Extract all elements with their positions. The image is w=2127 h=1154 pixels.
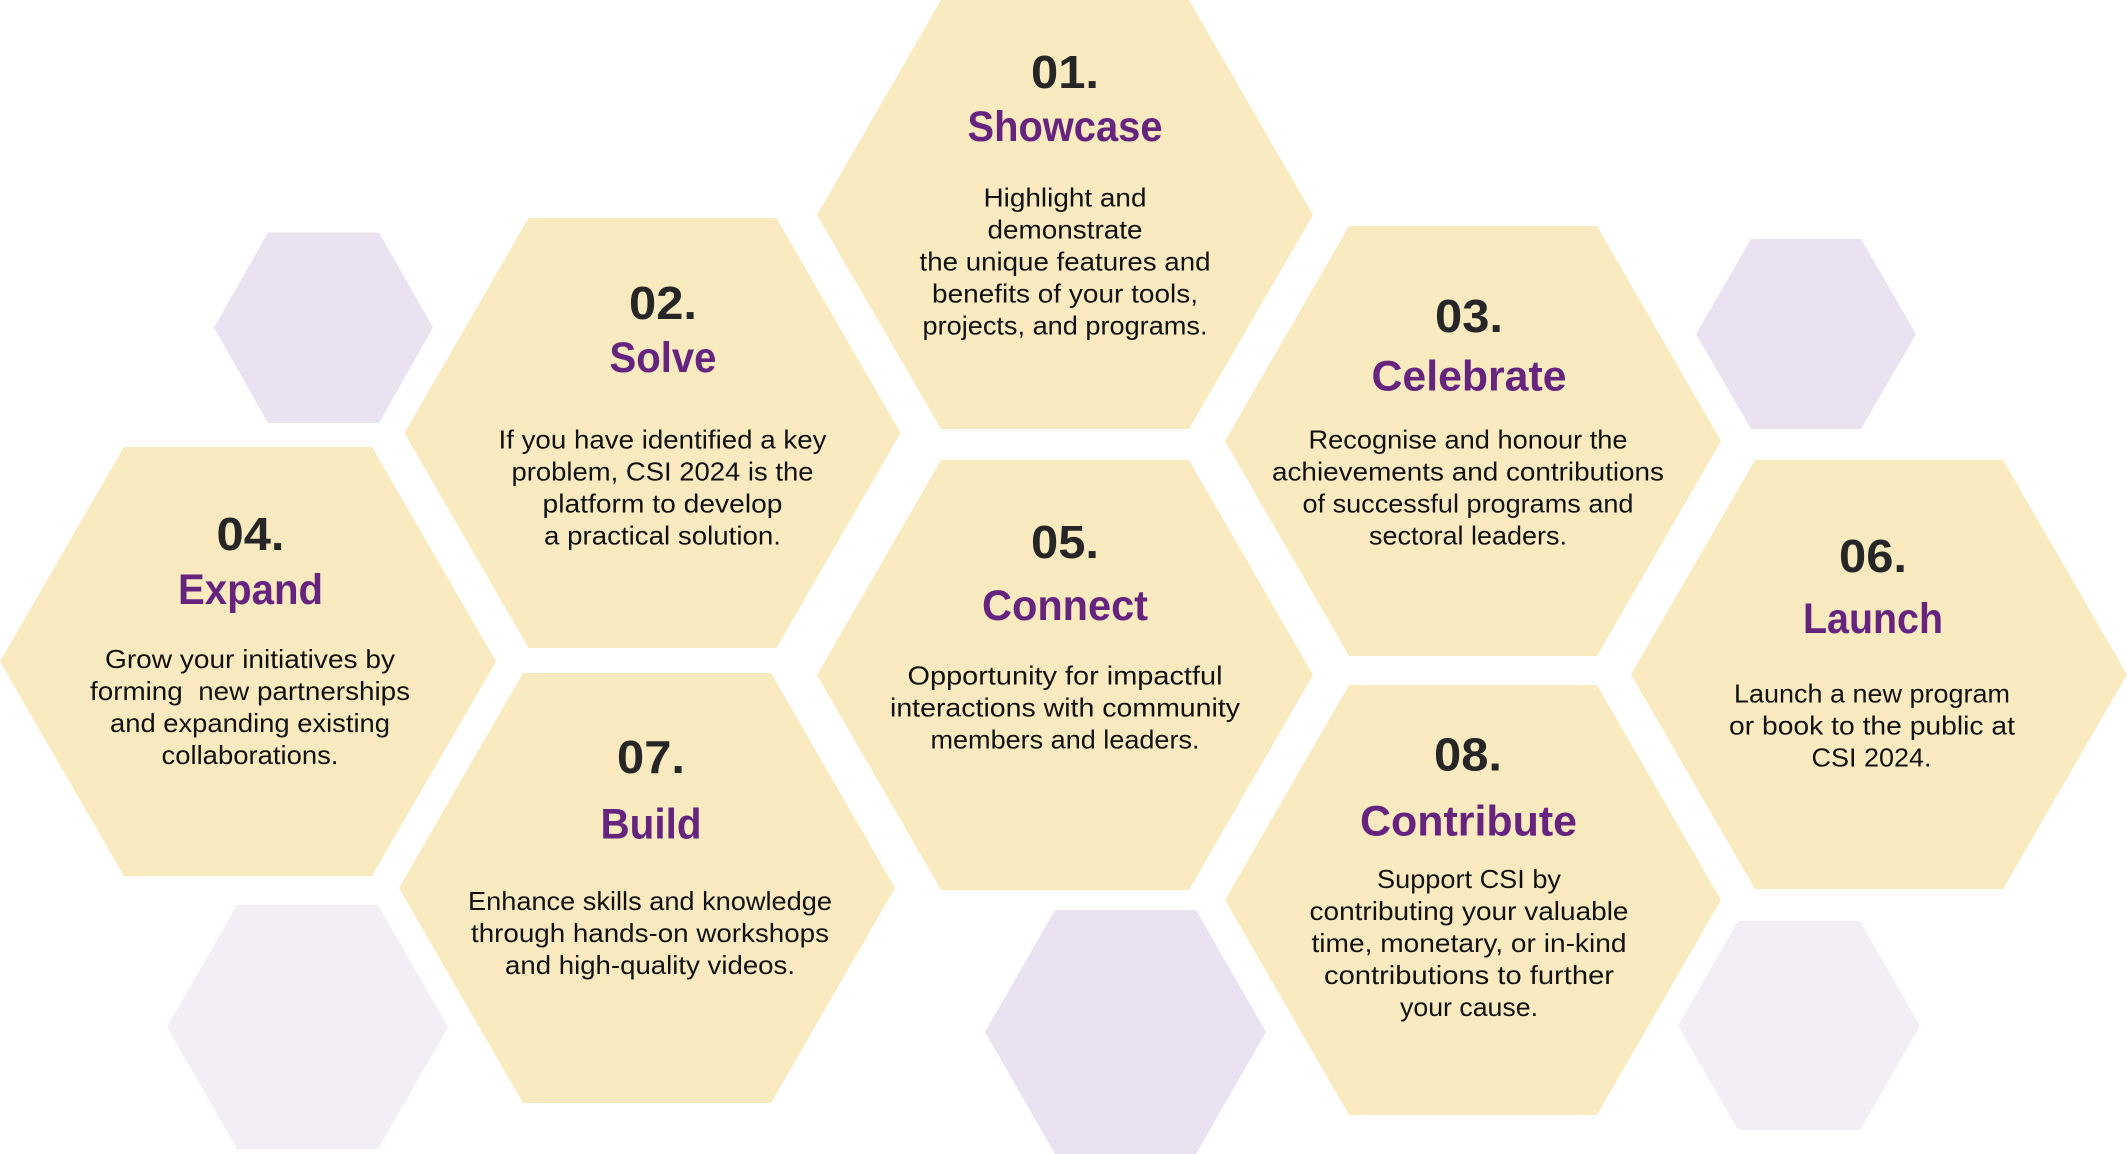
panel: 04 Expand bbox=[0, 447, 496, 876]
panel: 07 Build bbox=[399, 673, 895, 1103]
description 03: sectoral leaders. bbox=[1369, 520, 1567, 550]
panel: 06 Launch bbox=[1631, 460, 2127, 889]
description 05: members and leaders. bbox=[930, 724, 1200, 754]
panel: 08 Contribute bbox=[1225, 685, 1721, 1115]
description 01: the unique features and bbox=[920, 246, 1210, 276]
panel: 01 Showcase bbox=[817, 0, 1313, 429]
description 03: Recognise and honour the bbox=[1308, 424, 1628, 454]
description 04: forming new partnerships bbox=[90, 676, 410, 706]
description 07: through hands-on workshops bbox=[471, 918, 829, 948]
heading Contribute: Contribute bbox=[1360, 798, 1577, 846]
heading Connect: Connect bbox=[982, 582, 1148, 630]
decorative hexagon: top right lilac bbox=[1696, 239, 1916, 429]
hexagon background 05 bbox=[817, 460, 1313, 890]
description 05 bbox=[890, 660, 1240, 754]
description 07: Enhance skills and knowledge bbox=[468, 886, 832, 916]
description 08: your cause. bbox=[1400, 992, 1538, 1022]
description 08 bbox=[1310, 864, 1628, 1022]
description 05: interactions with community bbox=[890, 692, 1240, 722]
description 01: benefits of your tools, bbox=[932, 278, 1198, 308]
hexagon background 04 bbox=[0, 447, 496, 876]
description 06: Launch a new program bbox=[1734, 678, 2010, 708]
decorative hexagon: bottom left pale lilac bbox=[167, 905, 448, 1149]
description 08: time, monetary, or in-kind bbox=[1312, 928, 1626, 958]
decorative hexagon: bottom right pale lilac bbox=[1678, 921, 1920, 1130]
description 02 bbox=[498, 424, 826, 550]
number 07: 07. bbox=[617, 731, 685, 783]
description 04: collaborations. bbox=[162, 740, 338, 770]
decorative hexagon: bottom centre lilac bbox=[985, 910, 1266, 1154]
hexagon background 07 bbox=[399, 673, 895, 1103]
heading Expand: Expand bbox=[178, 566, 323, 614]
hexagon background 06 bbox=[1631, 460, 2127, 889]
description 04: and expanding existing bbox=[110, 708, 390, 738]
heading Build: Build bbox=[600, 800, 702, 848]
description 01: Highlight and bbox=[984, 182, 1146, 212]
description 08: Support CSI by bbox=[1377, 864, 1561, 894]
description 08: contributing your valuable bbox=[1310, 896, 1628, 926]
number 02: 02. bbox=[629, 277, 697, 329]
description 02: If you have identified a key bbox=[498, 424, 826, 454]
hexagon background 08 bbox=[1225, 685, 1721, 1115]
description 03: achievements and contributions bbox=[1272, 456, 1664, 486]
description 06: or book to the public at bbox=[1729, 710, 2016, 740]
description 01: demonstrate bbox=[988, 214, 1142, 244]
description 01 bbox=[920, 182, 1210, 340]
number 05: 05. bbox=[1031, 516, 1099, 568]
description 07: and high-quality videos. bbox=[505, 950, 795, 980]
description 01: projects, and programs. bbox=[922, 310, 1208, 340]
number 04: 04. bbox=[216, 508, 284, 560]
heading Celebrate: Celebrate bbox=[1372, 352, 1566, 400]
panel: 05 Connect bbox=[817, 460, 1313, 890]
description 08: contributions to further bbox=[1324, 960, 1614, 990]
description 06 bbox=[1729, 678, 2016, 772]
description 03: of successful programs and bbox=[1302, 488, 1634, 518]
number 08: 08. bbox=[1434, 728, 1502, 780]
number 06: 06. bbox=[1839, 530, 1907, 582]
panel: 02 Solve bbox=[404, 218, 900, 648]
description 02: a practical solution. bbox=[544, 520, 781, 550]
description 04: Grow your initiatives by bbox=[105, 644, 395, 674]
hexagon background 03 bbox=[1225, 226, 1721, 656]
description 04 bbox=[90, 644, 410, 770]
hexagon background 02 bbox=[404, 218, 900, 648]
hexagon background 01 bbox=[817, 0, 1313, 429]
heading Showcase: Showcase bbox=[968, 103, 1162, 151]
panel: 03 Celebrate bbox=[1225, 226, 1721, 656]
heading Launch: Launch bbox=[1803, 595, 1943, 643]
description 06: CSI 2024. bbox=[1812, 742, 1932, 772]
description 03 bbox=[1272, 424, 1664, 550]
description 05: Opportunity for impactful bbox=[908, 660, 1222, 690]
description 07 bbox=[468, 886, 832, 980]
number 03: 03. bbox=[1435, 290, 1503, 342]
number 01: 01. bbox=[1031, 46, 1099, 98]
heading Solve: Solve bbox=[610, 334, 716, 382]
decorative hexagon: top left lilac bbox=[214, 232, 433, 423]
description 02: problem, CSI 2024 is the bbox=[512, 456, 814, 486]
description 02: platform to develop bbox=[542, 488, 782, 518]
